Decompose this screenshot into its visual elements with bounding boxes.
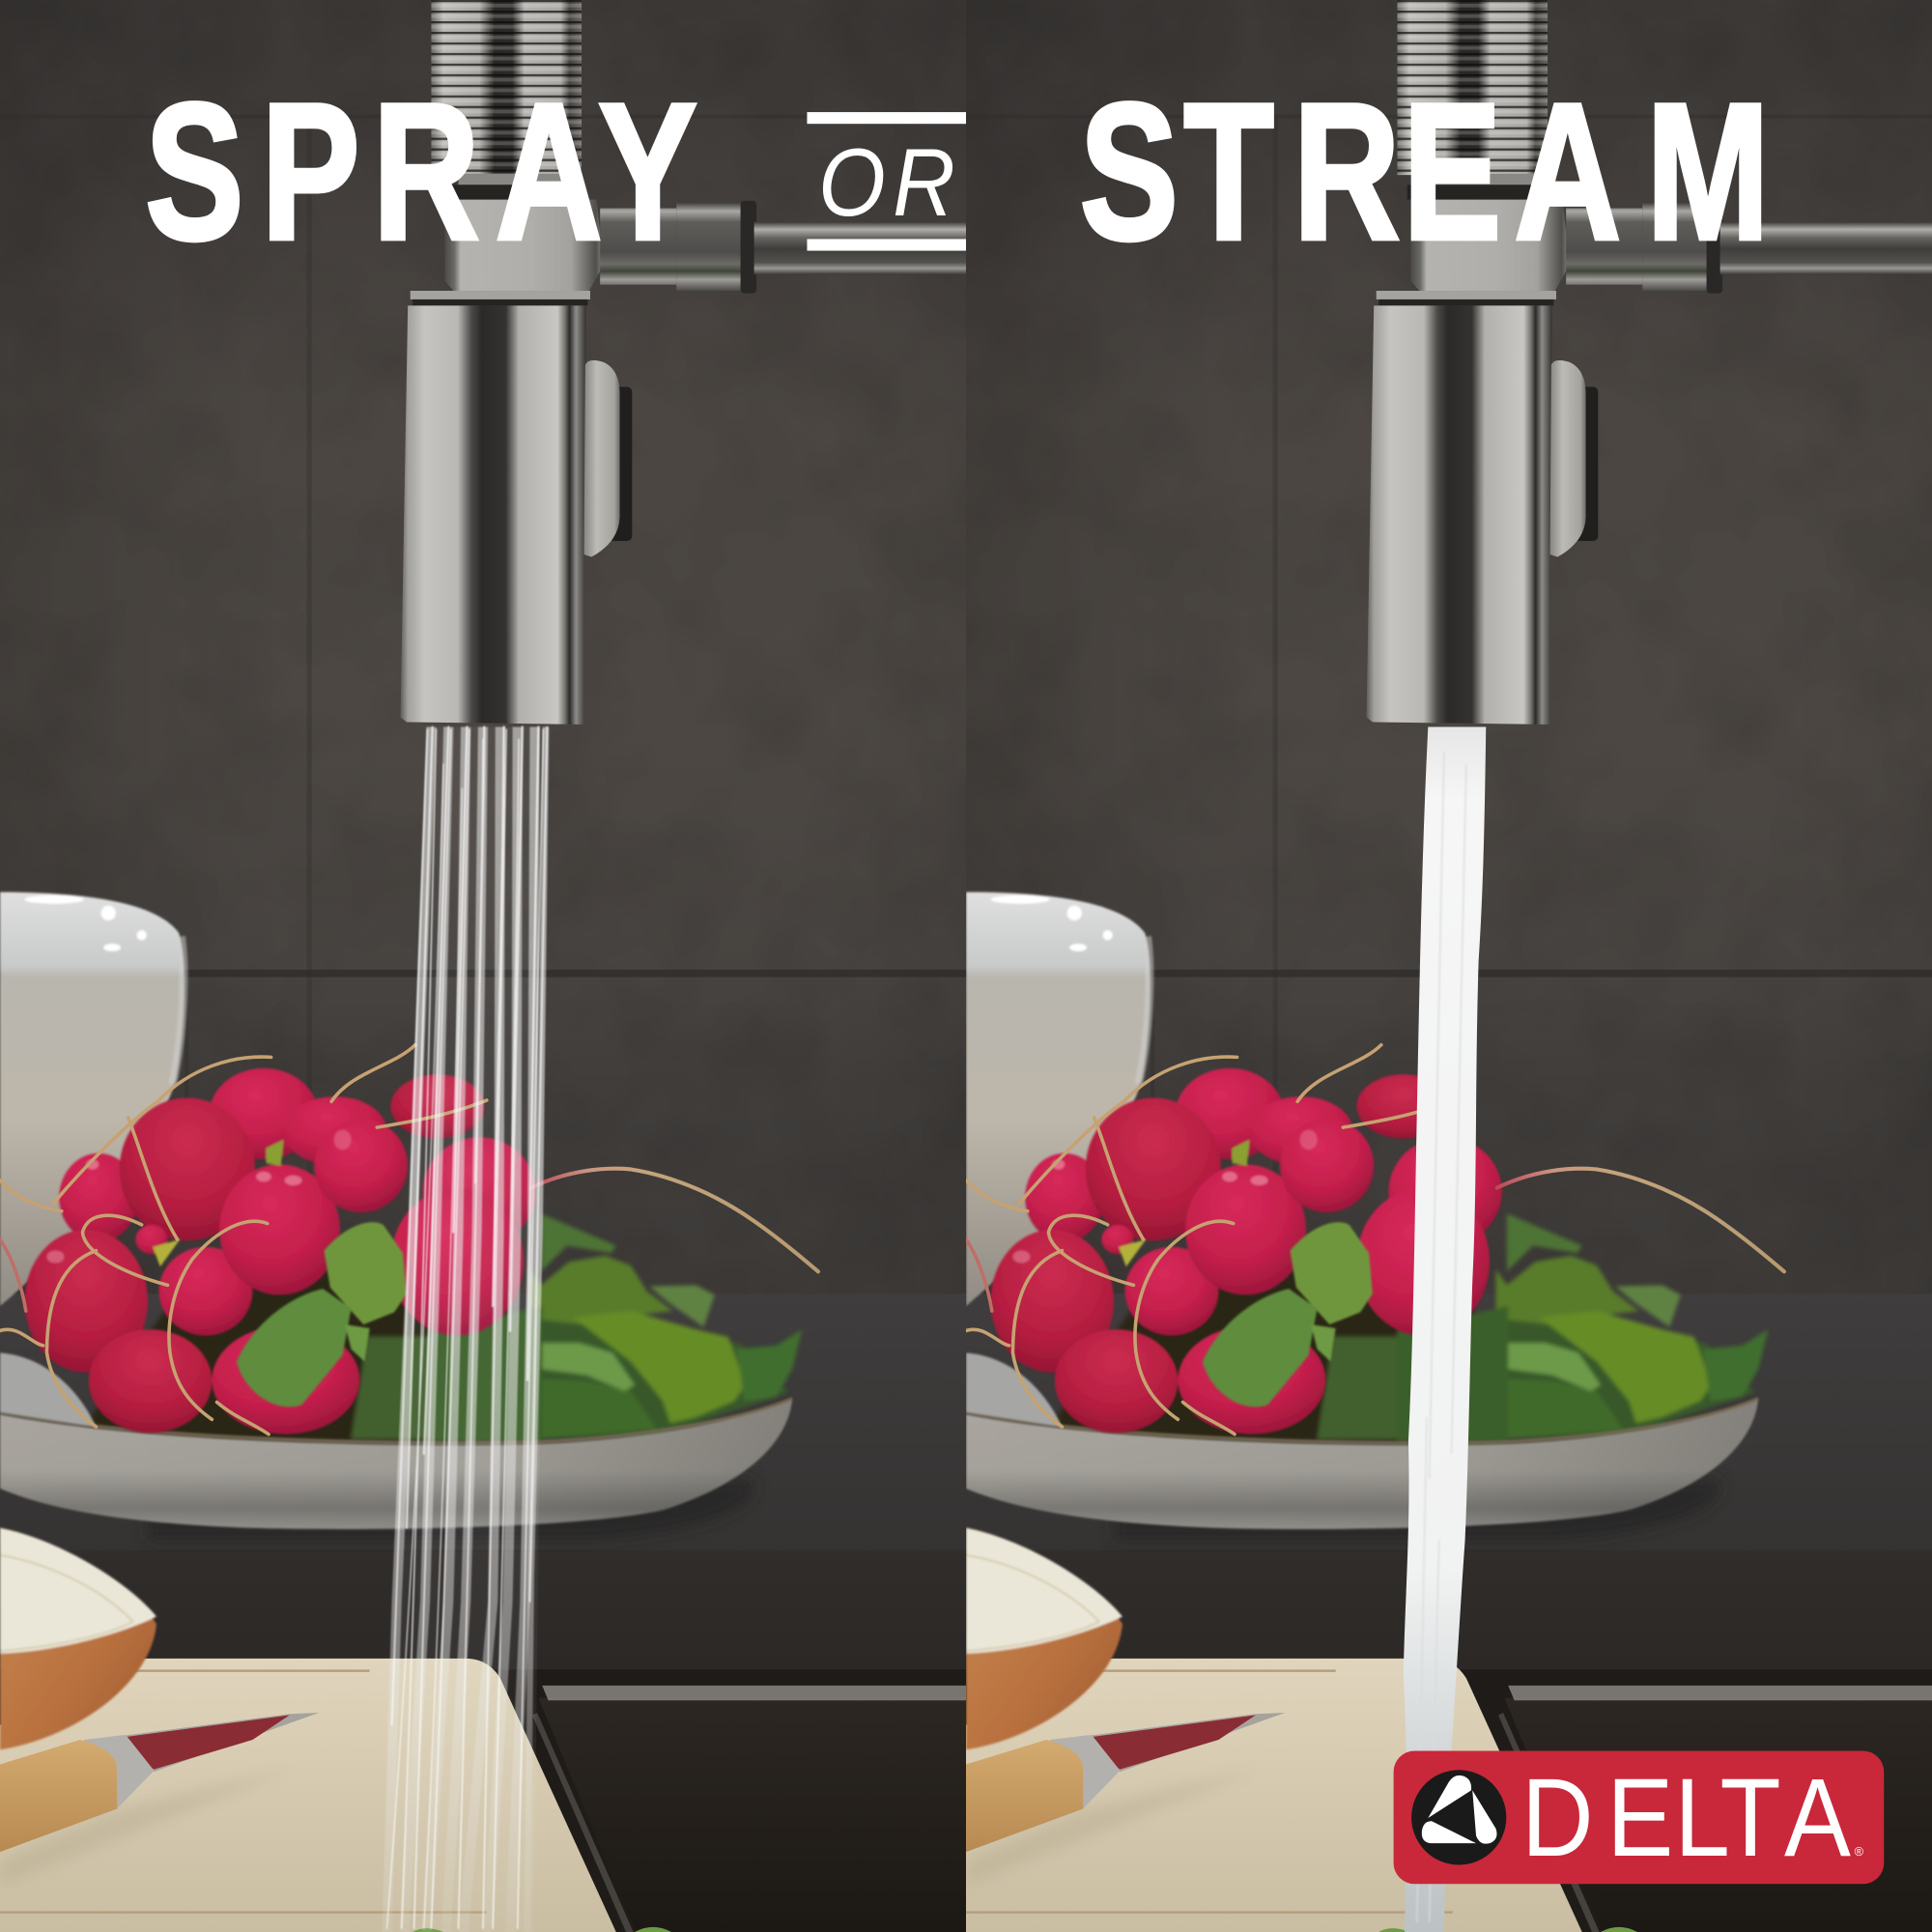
panel: kitchen scene, right bbox=[966, 0, 1932, 1932]
radish cluster bbox=[25, 1068, 536, 1435]
panel: kitchen scene, left bbox=[0, 0, 966, 1932]
fine strands bbox=[387, 727, 547, 1928]
back leaves bbox=[74, 1213, 802, 1441]
countertop bbox=[0, 1293, 966, 1932]
spray water, left bbox=[382, 727, 550, 1932]
sink bbox=[532, 1686, 966, 1932]
title rule, top bbox=[807, 112, 966, 124]
plate bbox=[0, 1353, 792, 1529]
title: STREAM: STREAM bbox=[1080, 63, 1770, 280]
collar ring bbox=[411, 291, 590, 305]
Delta logo badge bbox=[1394, 1750, 1884, 1884]
faucet spray head bbox=[401, 0, 966, 724]
long root, right side bbox=[531, 1169, 818, 1271]
kitchen knife bbox=[0, 1713, 319, 1852]
sprayer body bbox=[401, 305, 586, 724]
horizontal arm bbox=[600, 201, 966, 294]
title rule, bottom bbox=[807, 239, 966, 251]
coiled spring neck bbox=[431, 0, 582, 200]
icon: Delta triangle mark bbox=[1411, 1770, 1506, 1864]
onion half bbox=[0, 1528, 156, 1749]
tiled wall bbox=[0, 0, 966, 1355]
white bowl bbox=[0, 892, 185, 1306]
radishes and greens on a plate bbox=[0, 1045, 818, 1529]
cutting board bbox=[0, 1659, 616, 1932]
title: OR: OR bbox=[818, 129, 955, 237]
trigger button bbox=[584, 360, 632, 557]
elbow connector bbox=[444, 200, 604, 291]
water bundles bbox=[387, 727, 546, 1932]
registered mark: ® bbox=[1855, 1844, 1864, 1859]
bits of green at the bottom edge bbox=[412, 1927, 671, 1932]
stream water, right bbox=[1404, 727, 1486, 1932]
title: SPRAY: SPRAY bbox=[145, 63, 697, 280]
radish roots bbox=[0, 1045, 487, 1435]
wordmark: DELTA bbox=[1521, 1756, 1851, 1880]
plate shadow bbox=[148, 1479, 754, 1540]
front leaves bbox=[237, 1222, 407, 1407]
